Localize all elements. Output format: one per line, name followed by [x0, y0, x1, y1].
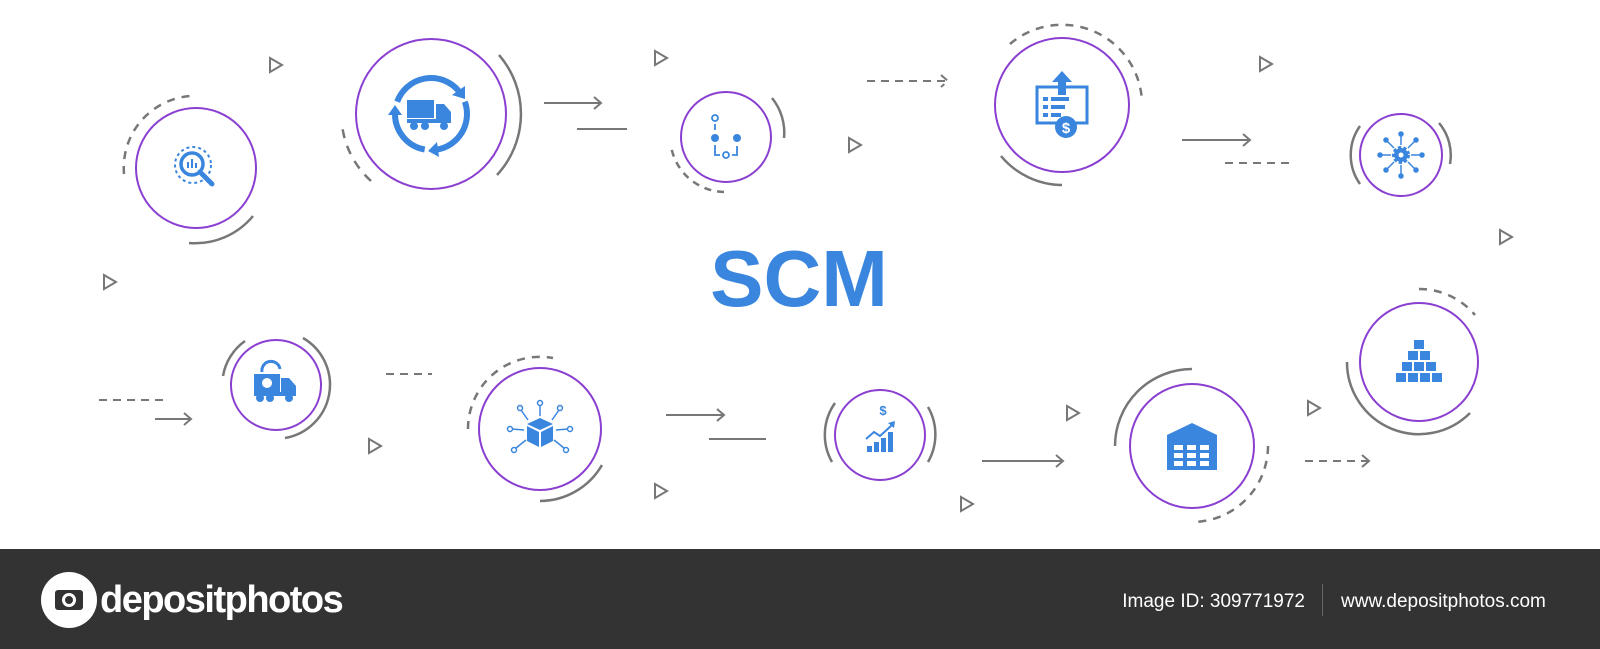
footer logo: depositphotos: [100, 579, 343, 621]
icon: document with dollar: [1037, 71, 1087, 138]
icon: magnifier chart: [175, 147, 212, 184]
footer bar: [0, 549, 1600, 649]
step 1: analytics search: [124, 96, 256, 243]
step 5: gear network: [1351, 114, 1451, 196]
icon: stacked boxes: [1396, 340, 1442, 382]
step 8: growth chart: [825, 390, 935, 480]
icon: gear with nodes: [1378, 132, 1424, 178]
step 9: warehouse: [1115, 369, 1268, 522]
step 7: box network: [468, 357, 602, 501]
icon: truck with arrows: [388, 78, 467, 157]
icon: truck refresh: [254, 361, 296, 402]
footer url: www.depositphotos.com: [1340, 591, 1546, 612]
icon: bars with dollar: $: [879, 403, 887, 418]
footer image id: Image ID: 309771972: [1122, 591, 1305, 612]
title: SCM: [710, 234, 888, 323]
icon: flow dots: [711, 115, 741, 158]
footer logo: [41, 572, 343, 628]
step 10: box pyramid: [1347, 289, 1478, 434]
step 4: invoice: [995, 25, 1142, 185]
icon: document with dollar: $: [1062, 120, 1071, 137]
arrows and connectors: [99, 51, 1512, 511]
icon: warehouse: [1167, 423, 1217, 470]
step 6: delivery truck: [223, 338, 330, 438]
step 2: truck cycle: [342, 39, 521, 189]
icon: open box: [508, 400, 572, 452]
step 3: process dots: [671, 92, 784, 192]
